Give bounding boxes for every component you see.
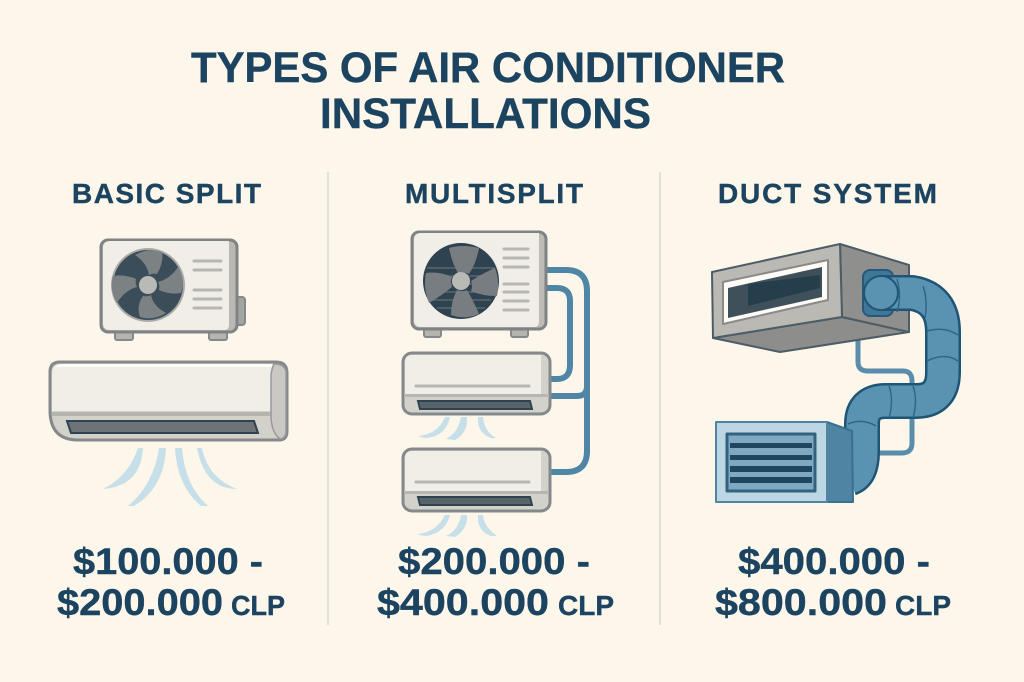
- icon: basic split indoor unit: [50, 362, 287, 440]
- price: basic split: $100.000 -: [73, 541, 263, 582]
- icon: ceiling duct unit: [712, 244, 909, 352]
- icon: multisplit airflow one: [418, 417, 496, 440]
- icon: basic split outdoor unit: [101, 240, 245, 340]
- icon: return air grille box: [716, 422, 853, 502]
- icon: basic split airflow: [103, 448, 237, 506]
- icon: thin refrigerant line: [858, 339, 912, 453]
- price: duct system: [715, 541, 951, 623]
- icon: refrigerant pipes: [546, 270, 587, 472]
- title: INSTALLATIONS: [320, 90, 651, 138]
- title: TYPES OF AIR CONDITIONER: [191, 44, 785, 92]
- price: basic split: $200.000: [57, 582, 223, 623]
- heading: multisplit: MULTISPLIT: [405, 178, 583, 209]
- icon: multisplit indoor unit one: [403, 353, 550, 414]
- panel: basic split illustration: [50, 240, 287, 506]
- price: duct system: CLP: [895, 590, 951, 621]
- icon: multisplit airflow two: [417, 515, 497, 537]
- icon: multisplit outdoor unit: [412, 232, 546, 337]
- price: basic split: CLP: [231, 590, 285, 621]
- price: duct system: $800.000: [715, 582, 887, 623]
- panel: duct system illustration: [712, 244, 958, 502]
- price: multisplit: $200.000 -: [398, 541, 590, 582]
- price: multisplit: $400.000: [377, 582, 549, 623]
- price: multisplit: CLP: [558, 590, 614, 621]
- icon: flexible duct: [848, 270, 958, 478]
- price: duct system: $400.000 -: [738, 541, 930, 582]
- price: basic split: [57, 541, 285, 623]
- title: [191, 44, 785, 138]
- heading: duct system: DUCT SYSTEM: [718, 178, 937, 209]
- price: multisplit: [377, 541, 614, 623]
- icon: multisplit indoor unit two: [403, 449, 550, 511]
- heading: basic split: BASIC SPLIT: [72, 178, 261, 209]
- panel: multisplit illustration: [403, 232, 587, 537]
